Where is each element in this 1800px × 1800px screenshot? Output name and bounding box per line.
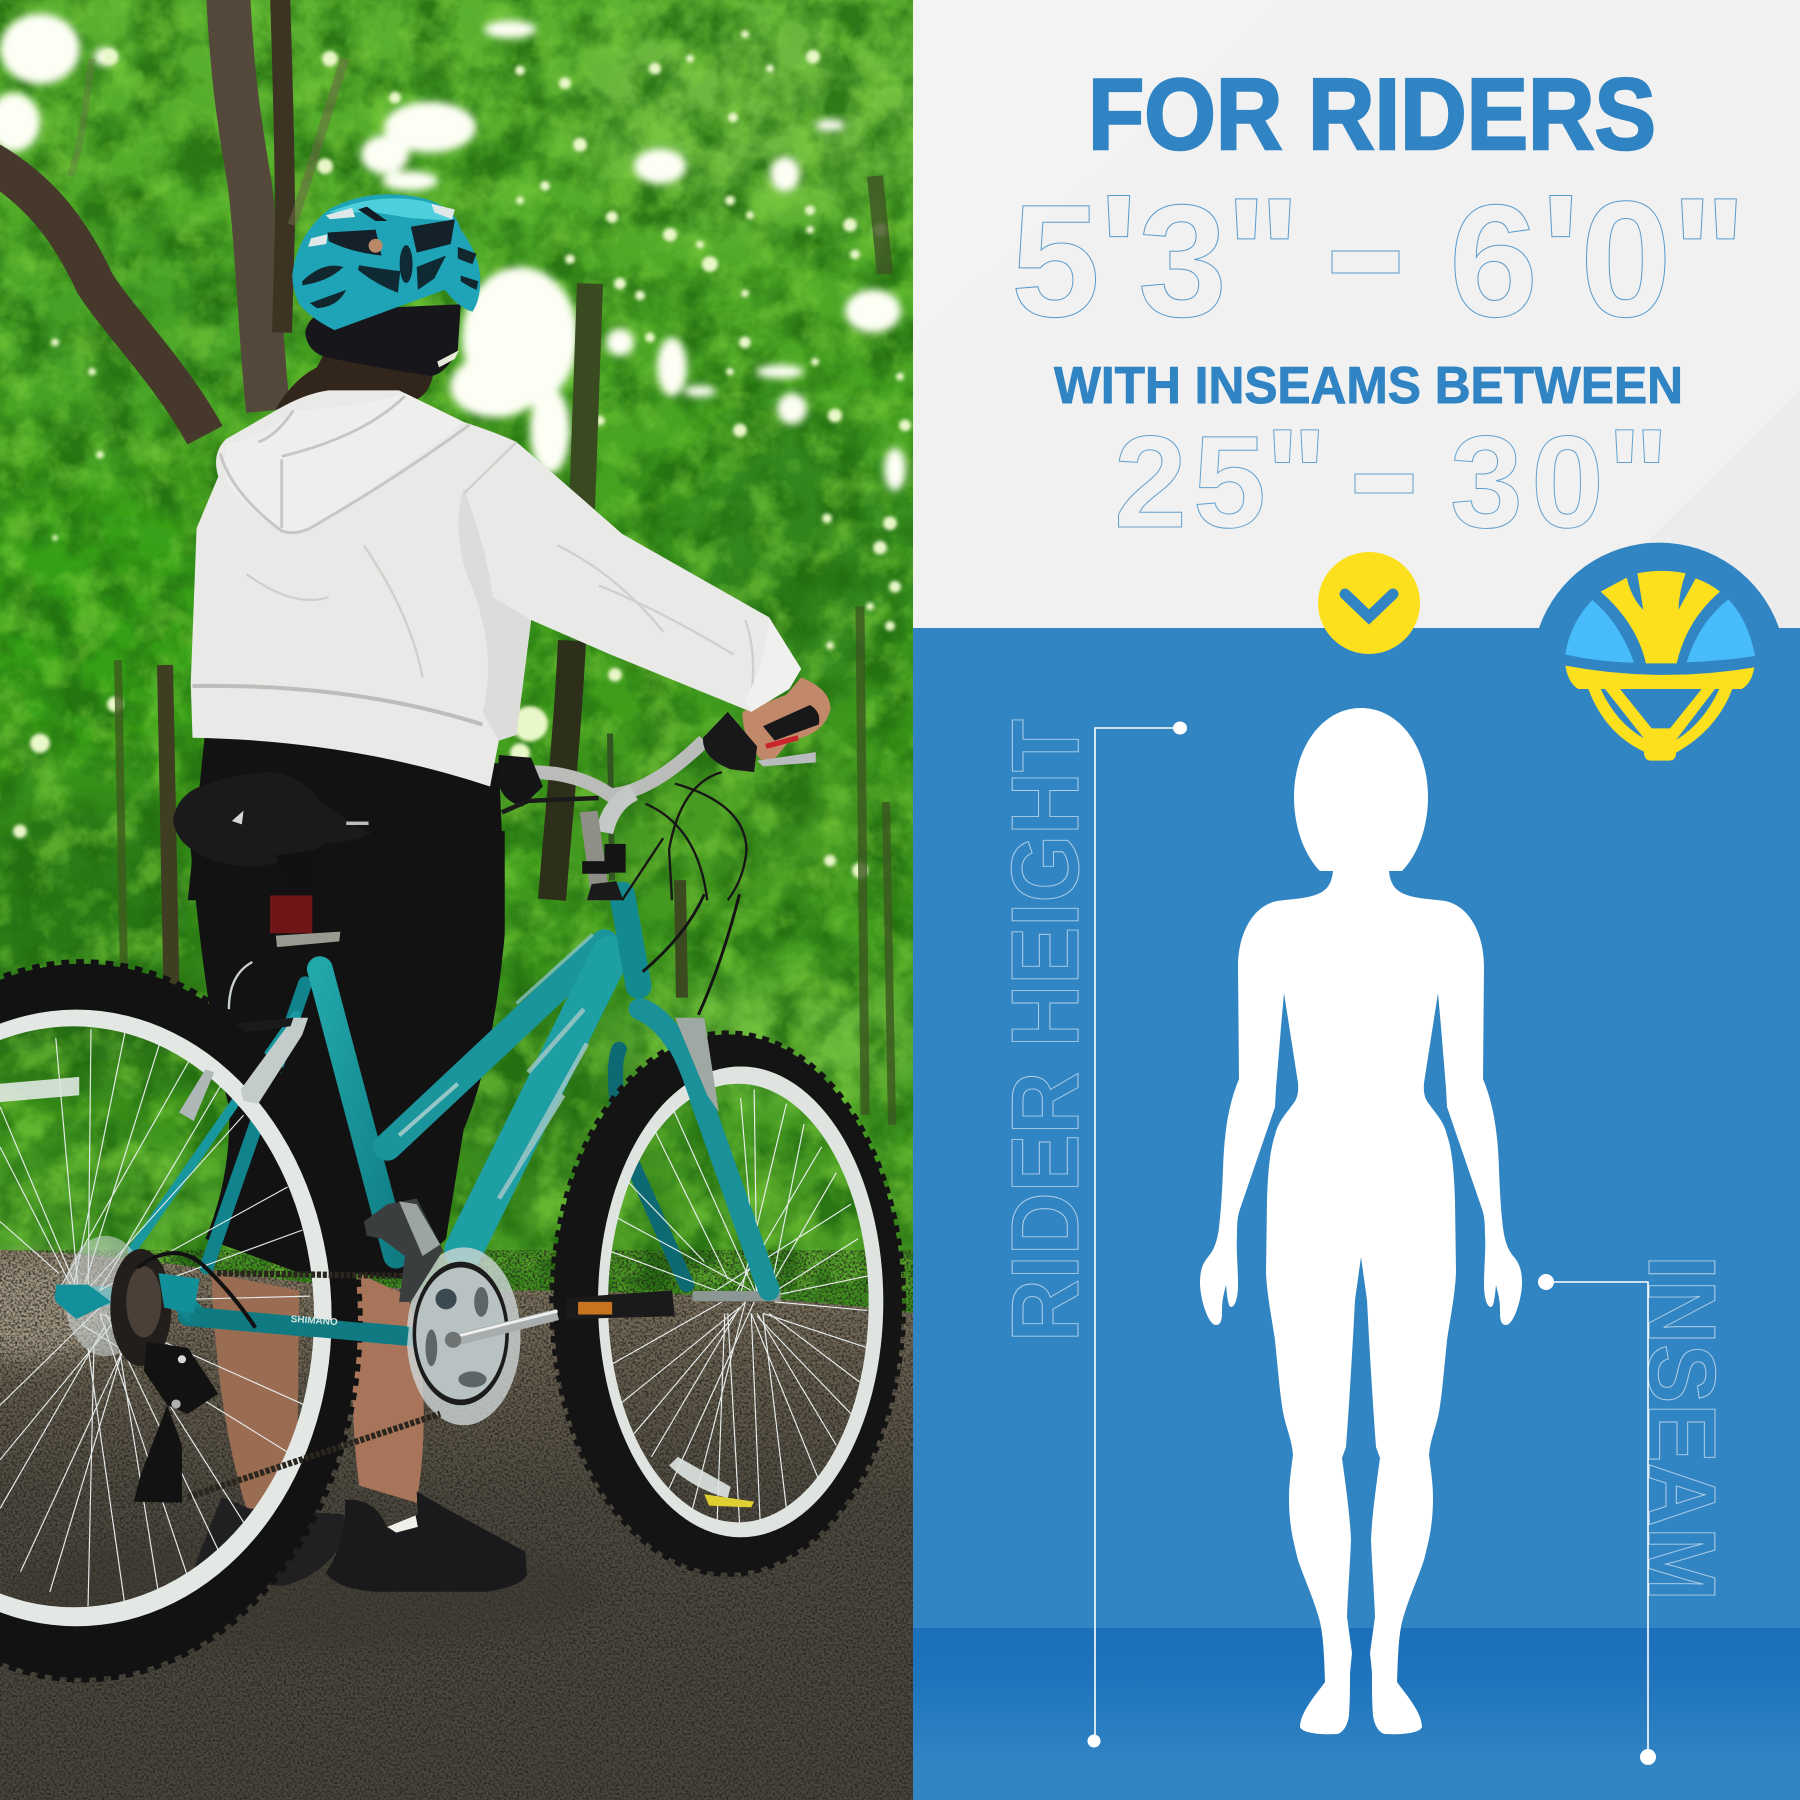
text: inseam range outline: 3 [1450,408,1523,555]
photo: mountain bicycle [0,705,902,1678]
panel: photo of rider with bicycle in forest [0,0,960,1800]
text: rider height range outline: " [1225,164,1301,343]
rider: white hoodie [191,390,801,787]
rider: hair [276,356,433,409]
text: with inseams between: WITH INSEAMS BETWEEN [1054,357,1683,415]
bike: frame tubes [65,894,769,1336]
bike: rear wheel [0,964,358,1678]
bike: red rear reflector [270,895,312,933]
bike: chain stay over wheel [191,1316,408,1336]
text: rider height vertical label: RIDER HEIGHT [992,719,1099,1342]
text: rider height range outline: 6 [1449,171,1538,350]
text: inseam range outline: " [1265,401,1327,548]
text: inseam range outline: 0 [1531,408,1604,555]
bike: front wheel [553,1034,902,1573]
rider: right shoe [326,1491,527,1592]
icon: female body silhouette [1200,708,1522,1734]
icon: yellow chevron badge [1318,552,1420,654]
bike: chain [188,1273,440,1497]
arrow: rider height measurement line [1088,722,1187,1748]
panel: blue silhouette background [913,628,1800,1800]
rider: black tights and legs [173,194,830,1592]
text: inseam range outline: 2 [1114,408,1187,555]
heading: for riders: FOR RIDERS [1088,59,1656,171]
bike: cables [643,894,739,1015]
rider: helmet [292,194,480,330]
photo: gravel ground [0,1250,913,1800]
text: inseam range outline: 5 [1193,408,1266,555]
bike: saddle [173,772,370,866]
bike: front wheel reflector [669,1457,731,1498]
rider: left shoe [191,1497,346,1586]
bike: chainring and crank [407,1247,558,1425]
bike: rear wheel reflector [0,1077,79,1102]
bike: front derailleur [364,1199,443,1302]
text: inseam range outline: " [1607,401,1669,548]
text: inseam vertical label: INSEAM [1628,1255,1735,1601]
text: rider height range outline: 5 [1011,171,1100,350]
photo: forest background [0,0,913,1313]
bike: pedal [566,1290,675,1319]
photo: tree trunks and branches [0,0,892,1125]
text: rider height range outline: ' [1099,160,1138,344]
bike: handlebar and grips [498,705,819,900]
photo: mountain bicycle: SHIMANO [290,1314,338,1328]
text: rider height range outline [1011,160,1747,351]
photo: bright sky patches through leaves [0,14,906,491]
bike: rear brake [179,962,308,1121]
rider: hand [742,677,830,766]
bike: fork over wheel [643,1009,769,1290]
bike: stem [580,811,610,900]
bike: rear cassette and derailleur [56,1236,255,1503]
arrow: inseam measurement line [1538,1274,1656,1765]
text: rider height range outline: ' [1541,160,1580,344]
text: rider height range outline: " [1671,164,1747,343]
photo: rider [173,194,830,1592]
text: rider height range outline: 3 [1138,171,1227,350]
text: rider height range outline: 0 [1580,167,1672,351]
icon: bicycle helmet badge [1539,543,1779,761]
text: inseam range outline [1114,401,1669,555]
panel: light header background [913,0,1800,628]
photo: bokeh highlights [13,30,911,878]
